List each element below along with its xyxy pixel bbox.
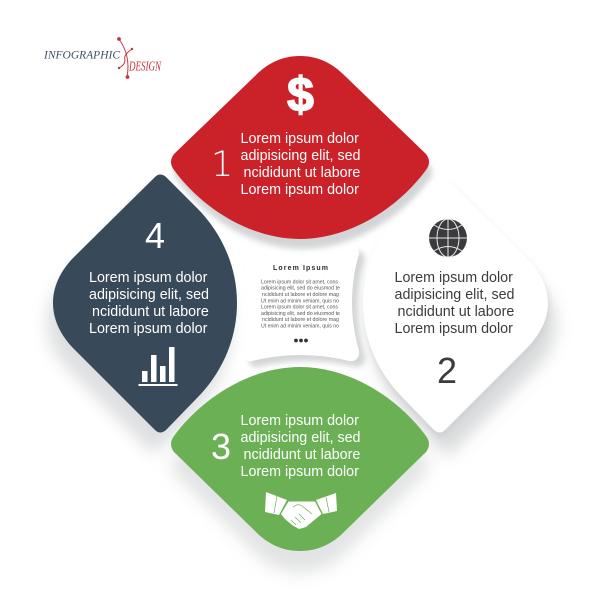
- text: panel 3: Lorem ipsum dolor: [240, 413, 359, 429]
- icon: dollar: $: [287, 69, 314, 122]
- center text: adipisicing elit, sed do eiusmod te: [261, 286, 340, 292]
- text: panel 2: ncididunt ut labore: [398, 304, 514, 320]
- logo: INFOGRAPHIC: [43, 48, 121, 62]
- panel 2: white leaf: [363, 174, 556, 454]
- icon: handshake: [265, 492, 337, 529]
- text: panel 3: ncididunt ut labore: [244, 447, 360, 463]
- text: panel 1: adipisicing elit, sed: [240, 148, 361, 164]
- panel 1: red: [171, 56, 432, 249]
- text: panel 3: [240, 413, 361, 480]
- text: panel 2: adipisicing elit, sed: [394, 287, 515, 303]
- text: panel 1: Lorem ipsum dolor: [240, 131, 359, 147]
- logo: [43, 37, 161, 79]
- center text: Ut enim ad minim veniam, quis no: [261, 298, 339, 304]
- text: panel 4: ncididunt ut labore: [92, 304, 209, 320]
- text: panel 4: [89, 270, 209, 337]
- text: panel 2: Lorem ipsum dolor: [394, 270, 513, 286]
- text: panel 2: Lorem ipsum dolor: [394, 321, 513, 337]
- text: panel 1: Lorem ipsum dolor: [240, 182, 359, 198]
- center text: Lorem ipsum dolor sit amet, cons: [261, 280, 338, 286]
- text: panel 3: adipisicing elit, sed: [240, 430, 361, 446]
- center text: adipisicing elit, sed do eiusmod te: [261, 311, 340, 317]
- center dots: [294, 339, 308, 342]
- text: panel 1: ncididunt ut labore: [244, 165, 360, 181]
- panel: center box: [242, 245, 365, 367]
- panel 3: green: [171, 367, 429, 573]
- center text: ncididunt ut labore et dolore mag: [262, 317, 339, 323]
- center text: ncididunt ut labore et dolore mag: [262, 292, 339, 298]
- logo: DESIGN: [128, 60, 161, 74]
- number 1: 1: [211, 145, 233, 185]
- number 2: 2: [437, 350, 457, 391]
- text: panel 4: Lorem ipsum dolor: [89, 270, 208, 286]
- text: panel 3: Lorem ipsum dolor: [240, 464, 359, 480]
- number 4: 4: [145, 215, 165, 256]
- text: panel 2: [394, 270, 515, 337]
- center text: [261, 280, 340, 329]
- center heading: Lorem Ipsum: [273, 265, 328, 272]
- text: panel 4: adipisicing elit, sed: [89, 287, 209, 303]
- icon: globe: [429, 219, 467, 257]
- center text: Ut enim ad minim veniam, quis no: [261, 323, 339, 329]
- panel 4: dark blue leaf: [47, 174, 237, 452]
- text: panel 1: [240, 131, 361, 198]
- center text: Lorem ipsum dolor sit amet, cons: [261, 304, 338, 310]
- text: panel 4: Lorem ipsum dolor: [89, 321, 208, 337]
- icon: bar chart: [138, 347, 178, 386]
- number 3: 3: [211, 426, 231, 467]
